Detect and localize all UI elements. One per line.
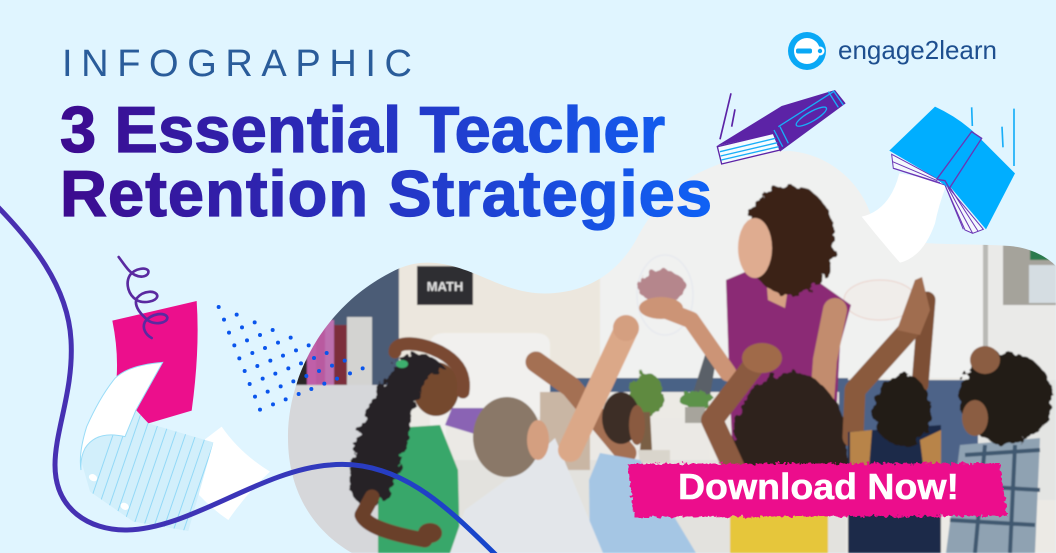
child with navy shirt bbox=[848, 277, 941, 553]
illustration: curling papers and spiral bbox=[77, 257, 270, 533]
child in blue shirt bbox=[536, 362, 696, 553]
book pages bbox=[892, 154, 983, 233]
boy in white shirt bbox=[450, 315, 639, 553]
illustration: blue open book bbox=[862, 107, 1015, 263]
child in plaid shirt bbox=[946, 346, 1052, 553]
illustration: purple book bbox=[717, 90, 846, 164]
title eyebrow: INFOGRAPHIC bbox=[62, 43, 412, 85]
decorative curve line bbox=[0, 207, 497, 553]
button: Download Now bbox=[628, 463, 1007, 517]
striped paper bbox=[82, 411, 214, 531]
brush banner bbox=[628, 463, 1007, 517]
book cover bbox=[889, 107, 1015, 229]
classroom photo bbox=[280, 140, 1056, 553]
button: Download Now: Download Now! bbox=[678, 466, 959, 507]
paper curl bbox=[80, 362, 163, 470]
logo mark bbox=[788, 32, 826, 70]
title bbox=[60, 93, 712, 230]
logo: engage2learn bbox=[788, 32, 997, 70]
title line 1: 3 Essential Teacher bbox=[60, 93, 665, 166]
flying white page bbox=[862, 173, 946, 263]
teacher bbox=[636, 183, 852, 442]
girl in green shirt bbox=[350, 344, 463, 553]
white paper bbox=[199, 427, 270, 520]
spiral bbox=[119, 257, 167, 338]
classroom photo: MATH bbox=[427, 279, 463, 294]
pink paper bbox=[112, 301, 198, 423]
child in yellow shirt bbox=[712, 343, 848, 553]
logo wordmark: engage2learn bbox=[838, 35, 997, 65]
title line 2: Retention Strategies bbox=[60, 157, 712, 230]
dot pattern bbox=[217, 305, 365, 412]
